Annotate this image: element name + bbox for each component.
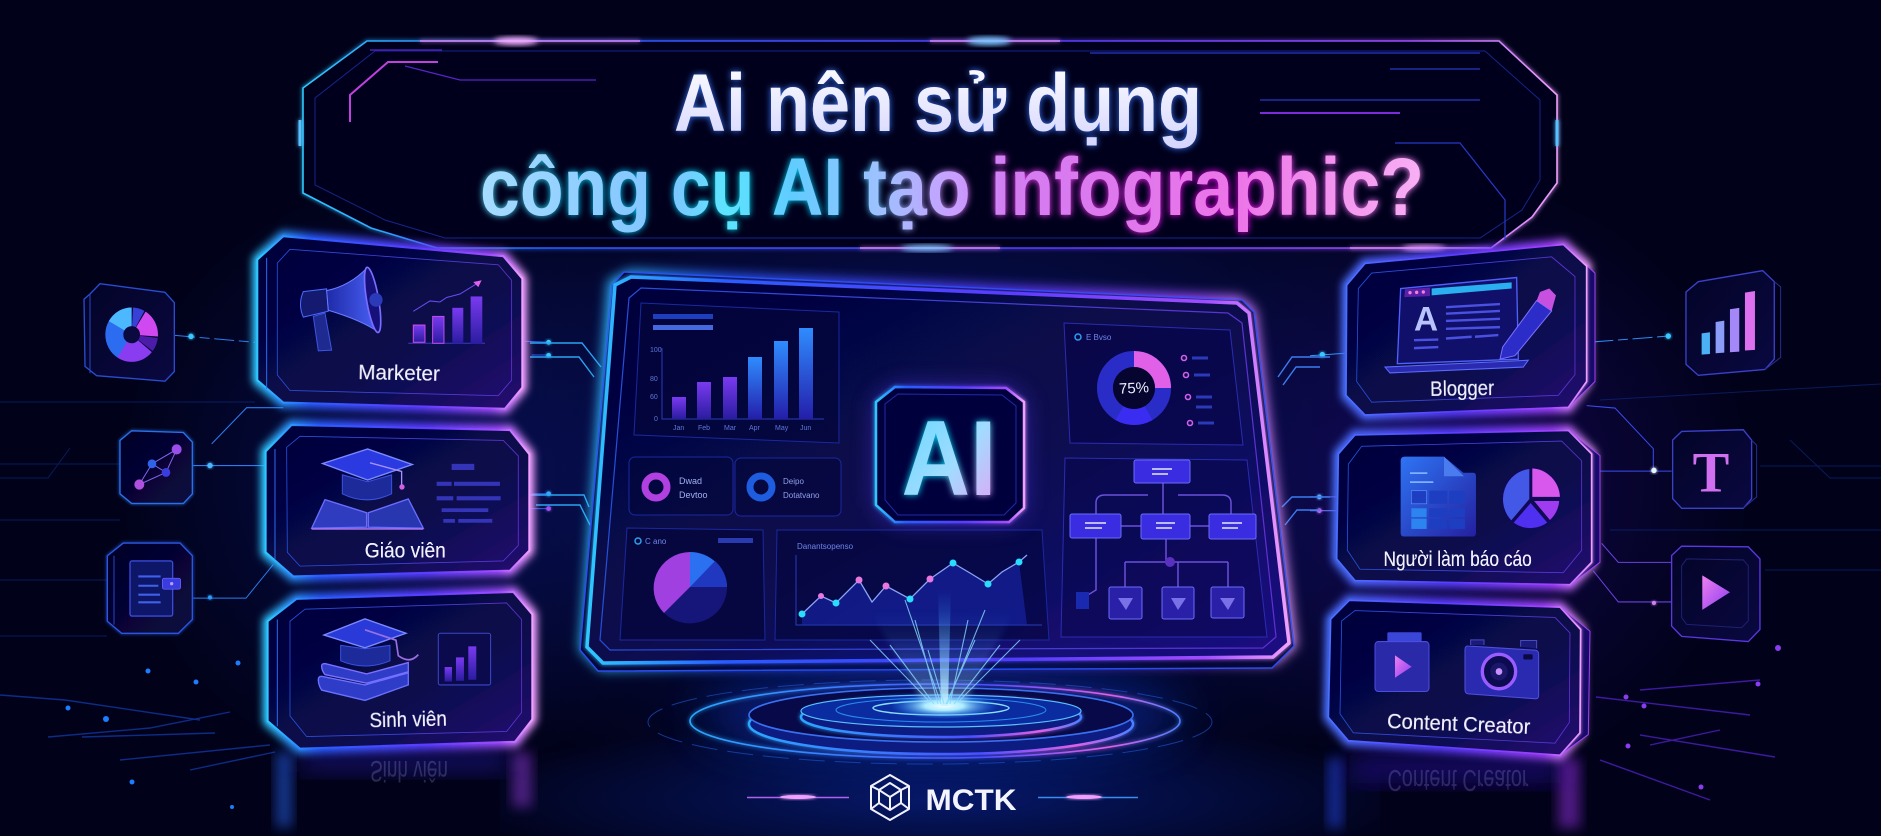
icon: rising bars	[1702, 291, 1755, 355]
title frame	[300, 37, 1557, 251]
label: Blogger: Blogger	[1430, 376, 1494, 401]
sub-panel: flowchart	[1061, 458, 1267, 637]
title	[480, 58, 1424, 233]
icon: letter T: T	[1693, 442, 1729, 505]
label: Sinh viên: Sinh viên	[369, 706, 447, 732]
sub-panel: pie chart: C ano	[645, 537, 667, 546]
label: Content Creator: Content Creator	[1387, 709, 1531, 739]
icon: graduation cap on open book	[312, 449, 423, 529]
sub-panel: bar chart: May	[775, 425, 789, 432]
panel: Giáo viên	[266, 425, 529, 576]
label: Người làm báo cáo: Người làm báo cáo	[1383, 546, 1532, 571]
icon: document with tag	[130, 561, 181, 616]
sub-panel: donut 75%	[1064, 323, 1243, 445]
sub-panel: bar chart: Jun	[800, 425, 811, 432]
icon: camera	[1465, 640, 1539, 699]
icon: video clip folder	[1375, 632, 1429, 691]
text lines	[437, 464, 501, 523]
sub-panel: line chart: Danantsopenso	[797, 542, 854, 551]
panel: Content Creator	[1328, 600, 1590, 755]
tile: bar chart icon	[1686, 271, 1781, 375]
right connectors	[1310, 333, 1672, 605]
icon: framed chart	[438, 633, 491, 685]
icon: megaphone	[300, 266, 384, 351]
logo: MCTK	[747, 775, 1138, 820]
sub-panel: donut 75%: E Bvso	[1086, 333, 1112, 342]
sub-panel: small donut stats: Deipo	[783, 477, 804, 486]
logo: MCTK: MCTK	[926, 784, 1017, 817]
panel: Người làm báo cáo	[1337, 430, 1600, 585]
tile: pie icon	[84, 284, 174, 381]
icon: play triangle	[1702, 575, 1730, 610]
AI badge	[876, 387, 1024, 522]
left connectors	[175, 334, 551, 600]
panel: Marketer	[257, 236, 522, 409]
sub-panel: donut 75%: 75%	[1119, 379, 1149, 398]
sub-panel: line chart	[775, 530, 1049, 640]
title: công cụ AI tạo infographic?	[480, 142, 1424, 233]
reflections on floor	[276, 748, 1580, 828]
sub-panel: bar chart	[634, 303, 839, 443]
icon: laptop with article	[1385, 278, 1528, 373]
label: Marketer: Marketer	[358, 360, 440, 386]
panel: Blogger	[1346, 244, 1595, 415]
AI badge: AI	[902, 398, 996, 518]
icon: laptop with article: A	[1414, 300, 1438, 339]
panel: Sinh viên	[268, 592, 532, 749]
panel: central dashboard	[580, 272, 1294, 671]
sub-panel: bar chart: 60	[650, 394, 658, 401]
sub-panel: small donut stats: Dotatvano	[783, 491, 820, 500]
title: Ai nên sử dụng	[674, 58, 1202, 149]
sub-panel: bar chart: Feb	[698, 425, 710, 432]
reflections on floor: Content Creator	[1388, 763, 1529, 798]
tile: play icon	[1672, 546, 1760, 642]
sub-panel: bar chart: 100	[650, 347, 662, 354]
icon: rising bar chart	[408, 280, 485, 344]
sub-panel: bar chart: Mar	[724, 425, 737, 432]
sub-panel: bar chart: Apr	[749, 425, 761, 432]
icon: pie chart	[1502, 468, 1561, 529]
sub-panel: bar chart: 80	[650, 376, 658, 383]
sub-panel: bar chart: 0	[654, 416, 658, 423]
label: Giáo viên: Giáo viên	[365, 538, 446, 563]
holographic platform	[648, 590, 1212, 764]
tile: type icon	[1673, 430, 1757, 508]
tile: network line icon	[120, 431, 192, 503]
sub-panel: bar chart: Jan	[673, 425, 684, 432]
icon: hexagon cube	[871, 775, 909, 820]
sub-panel: small donut stats: Dwad	[679, 476, 702, 486]
icon: spreadsheet document	[1401, 457, 1476, 537]
central circuit connectors	[530, 343, 1330, 525]
icon: segmented pie	[114, 317, 149, 353]
icon: graduation cap on books	[318, 619, 418, 700]
icon: connected nodes	[134, 444, 182, 490]
light beams	[870, 590, 1020, 706]
sub-panel: small donut stats: Devtoo	[679, 490, 708, 500]
tile: document icon	[107, 543, 192, 633]
reflections on floor: Sinh viên	[370, 754, 448, 788]
icon: pencil	[1500, 289, 1556, 359]
sub-panel: pie chart	[620, 528, 765, 640]
sub-panel: small donut stats	[629, 457, 841, 516]
